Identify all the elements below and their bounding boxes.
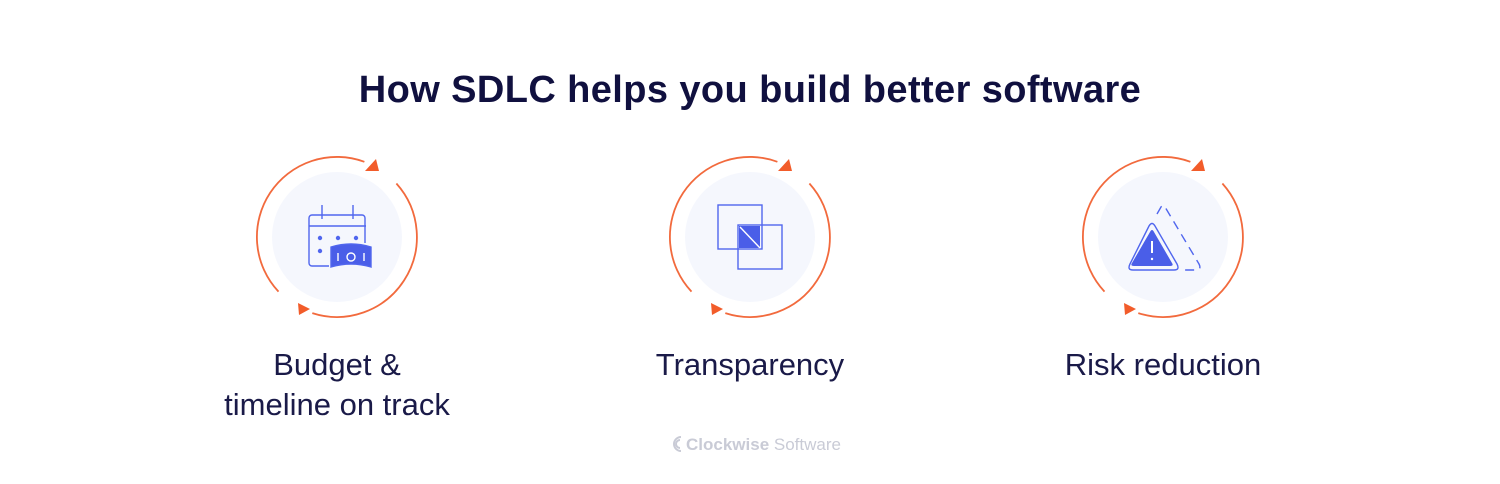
label: risk: Risk reduction	[1065, 347, 1261, 382]
icon: calendar with money	[309, 205, 371, 267]
panel: transparency	[656, 157, 845, 382]
icon: cycle ring transparency	[670, 157, 830, 317]
icon: overlapping squares	[718, 205, 782, 269]
title: How SDLC helps you build better software	[359, 69, 1141, 111]
panel: budget: timeline on track	[224, 387, 450, 422]
icon: warning triangles	[1129, 206, 1200, 270]
panel: budget	[224, 157, 450, 422]
icon: cycle ring risk	[1083, 157, 1243, 317]
label: budget: Budget &	[273, 347, 401, 382]
logo: Clockwise Software	[686, 435, 841, 454]
panel: risk	[1065, 157, 1261, 382]
icon: cycle ring budget	[257, 157, 417, 317]
label: transparency: Transparency	[656, 347, 845, 382]
